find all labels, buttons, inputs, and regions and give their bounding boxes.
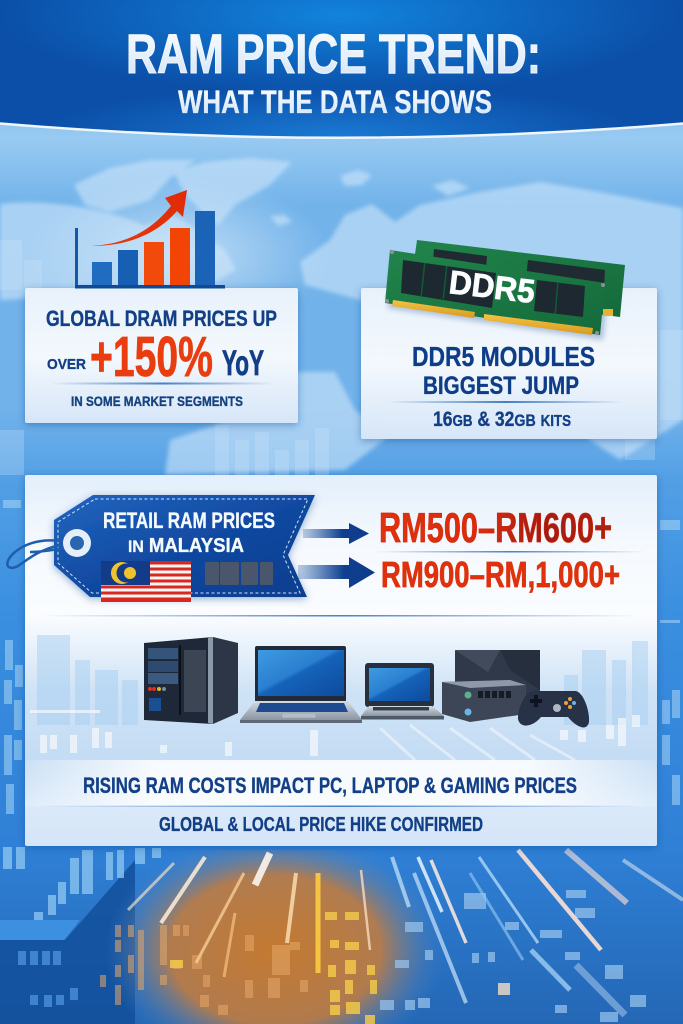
light streak floor: [30, 710, 640, 760]
icon: small laptop: [361, 663, 444, 720]
text: DDR5 modules biggest jump: [412, 341, 595, 400]
icon: game controller: [518, 691, 589, 727]
center data blocks: [100, 925, 308, 1015]
left slab: [0, 920, 80, 940]
text: DDR5 modules biggest jump: DDR5 MODULES: [412, 341, 595, 372]
icon: RAM chips: [205, 562, 273, 585]
right data blocks: [380, 890, 646, 1022]
label: DDR5: DDR5: [447, 263, 537, 310]
panel: retail RAM prices and impact: [7, 475, 657, 846]
text: DDR5 modules biggest jump: BIGGEST JUMP: [423, 372, 579, 400]
title: [126, 22, 541, 120]
bottom tech floor: [0, 847, 683, 1024]
data pixel texture: [0, 240, 683, 475]
text: retail RAM prices in Malaysia: [103, 508, 275, 557]
world map: [0, 158, 683, 475]
icon: DDR5 RAM sticks: [385, 240, 625, 340]
bar chart with rising arrow: [75, 190, 225, 288]
text: over 150 percent: OVER: [47, 356, 86, 373]
header banner: [0, 0, 683, 138]
arrow: to second price: [298, 557, 375, 588]
front module: [385, 250, 605, 335]
text: in some market segments: IN SOME MARKET SEGMENTS: [71, 393, 243, 409]
icon: Malaysian flag: [101, 561, 191, 602]
back module: [410, 240, 625, 317]
icon: game console and box: [442, 650, 540, 722]
panel: global DRAM prices: [25, 190, 298, 423]
text: over 150 percent: +150%: [90, 325, 213, 389]
text: rising RAM costs impact: [26, 760, 656, 806]
text: over 150 percent: YoY: [222, 344, 264, 383]
icon: desktop PC: [144, 637, 238, 724]
text: retail RAM prices in Malaysia: RETAIL RAM PRICES: [103, 508, 275, 533]
left pale columns: [3, 847, 161, 928]
text: global and local price hike confirmed: GLOBAL & LOCAL PRICE HIKE CONFIRMED: [159, 814, 483, 836]
skyline backdrop: [37, 635, 648, 725]
text: global DRAM prices: GLOBAL DRAM PRICES UP: [46, 306, 277, 331]
icon: tag string and eyelet: [7, 529, 91, 568]
text: retail RAM prices in Malaysia: IN MALAYSIA: [128, 535, 244, 557]
price tag: [7, 495, 315, 602]
panel: DDR5 modules: [361, 240, 657, 439]
title: RAM PRICE TREND:: [126, 22, 541, 85]
title: WHAT THE DATA SHOWS: [178, 84, 492, 120]
light streaks: [128, 850, 683, 1015]
side column texture: [3, 500, 680, 814]
icon: large laptop: [240, 646, 362, 723]
arrow: to first price: [303, 523, 369, 544]
text: 16GB and 32GB kits: 16GB & 32GB KITS: [433, 408, 571, 431]
